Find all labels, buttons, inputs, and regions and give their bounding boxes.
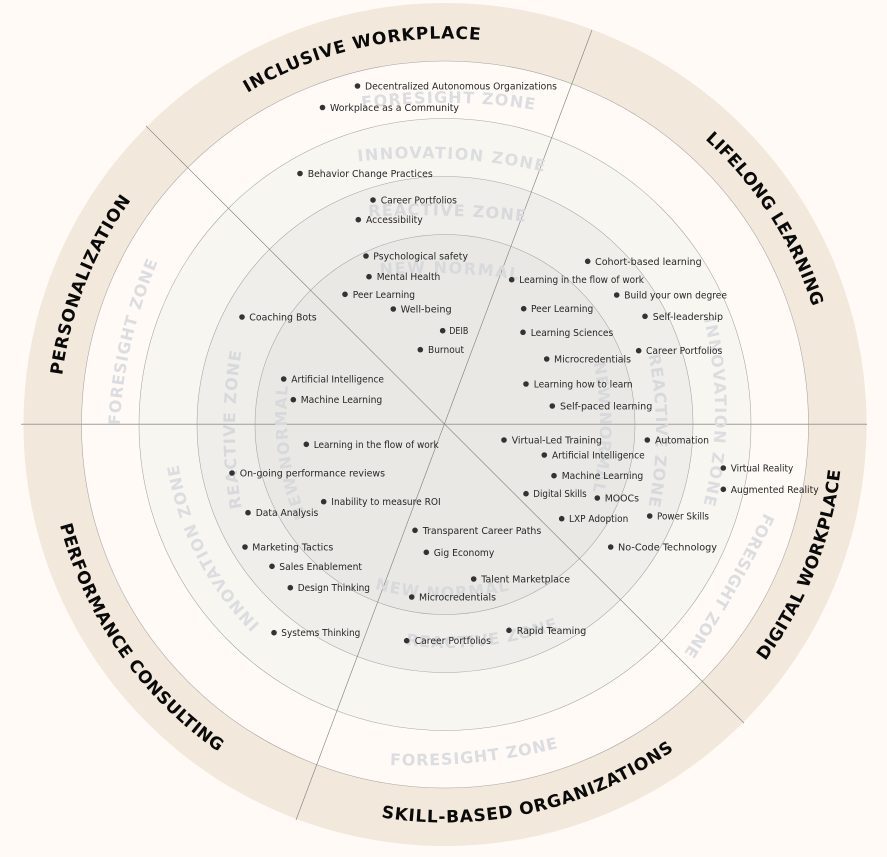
topic: Inability to measure ROI: Inability to measure ROI: [331, 497, 441, 508]
topic: No-Code Technology: No-Code Technology: [618, 542, 717, 554]
innovation zone ring: [139, 118, 751, 730]
topic: Machine Learning: Machine Learning: [301, 395, 382, 406]
zone labels: [108, 91, 774, 766]
topic: Automation: Automation: [655, 436, 709, 446]
topic: Microcredentials: Microcredentials: [419, 592, 496, 604]
title: performance consulting: PERFORMANCE CONSULTING: [60, 523, 224, 750]
topic: Learning in the flow of work: Learning in the flow of work: [314, 440, 439, 451]
title: digital workplace: DIGITAL WORKPLACE: [756, 470, 840, 660]
title: lifelong learning: LIFELONG LEARNING: [706, 131, 824, 306]
topic: LXP Adoption: LXP Adoption: [569, 514, 628, 525]
zone: new normal top: NEW NORMAL: [380, 261, 518, 280]
topic: Machine Learning: Machine Learning: [562, 471, 643, 482]
topic markers: inclusive workplace sector: [297, 82, 557, 356]
topic: Sales Enablement: Sales Enablement: [279, 562, 362, 573]
topic markers: personalization sector: [239, 312, 384, 406]
topic: Career Portfolios: Career Portfolios: [415, 636, 491, 647]
zone: foresight top: FORESIGHT ZONE: [362, 91, 535, 110]
title: skill-based organizations: SKILL-BASED ORGANIZATIONS: [382, 741, 672, 822]
topic: Well-being: Well-being: [401, 304, 452, 316]
topic: DEIB: [440, 326, 468, 337]
topic: On-going performance reviews: On-going performance reviews: [240, 468, 385, 480]
topic: Microcredentials: Microcredentials: [554, 354, 631, 366]
topic: Peer Learning: Peer Learning: [353, 290, 415, 301]
topic: Design Thinking: Design Thinking: [298, 583, 370, 594]
topic: Decentralized Autonomous Organizations: Decentralized Autonomous Organizations: [365, 82, 557, 92]
zone: innovation right: INNOVATION ZONE: [704, 317, 727, 506]
topic: Psychological safety: Psychological safety: [373, 252, 468, 262]
topic: Data Analysis: Data Analysis: [256, 508, 318, 519]
topic: Mental Health: Mental Health: [377, 272, 440, 283]
topic: Self-leadership: Self-leadership: [653, 312, 723, 323]
zone: innovation left: INNOVATION ZONE: [167, 466, 259, 632]
topic: Virtual Reality: Virtual Reality: [731, 464, 794, 474]
topic: Artificial Intelligence: Artificial Intelligence: [291, 374, 384, 386]
title: inclusive workplace: INCLUSIVE WORKPLACE: [242, 26, 480, 92]
zone: foresight lower right: FORESIGHT ZONE: [684, 514, 774, 658]
title: personalization: PERSONALIZATION: [50, 194, 130, 374]
topic markers: performance consulting sector: [229, 440, 441, 639]
topic: Artificial Intelligence: Artificial Intelligence: [552, 450, 645, 462]
zone: reactive bottom: REACTIVE ZONE: [407, 618, 557, 648]
topic: DEIB: DEIB: [449, 326, 468, 337]
new normal zone disc: [255, 234, 635, 614]
topic: Virtual-Led Training: Virtual-Led Training: [512, 436, 602, 446]
topic: Augmented Reality: Augmented Reality: [731, 485, 819, 496]
topic: Career Portfolios: Career Portfolios: [381, 196, 457, 206]
topic: Learning Sciences: Learning Sciences: [531, 328, 613, 339]
topic: Workplace as a Community: Workplace as a Community: [330, 103, 459, 114]
topic: Coaching Bots: Coaching Bots: [249, 312, 317, 324]
topic: Peer Learning: Peer Learning: [531, 304, 593, 315]
topic: Transparent Career Paths: Transparent Career Paths: [422, 526, 541, 537]
topic: Learning how to learn: Learning how to learn: [534, 380, 633, 390]
topic: Burnout: Burnout: [428, 345, 464, 356]
topic markers: lifelong learning sector: [509, 257, 727, 412]
topic: Talent Marketplace: Talent Marketplace: [480, 574, 570, 586]
zone: foresight bottom: FORESIGHT ZONE: [391, 737, 557, 766]
zone: reactive right: REACTIVE ZONE: [648, 354, 668, 507]
topic: Behavior Change Practices: Behavior Change Practices: [308, 169, 433, 180]
topic: Digital Skills: Digital Skills: [533, 489, 587, 500]
topic: Cohort-based learning: Cohort-based learning: [595, 257, 702, 268]
topic: Systems Thinking: Systems Thinking: [281, 628, 360, 639]
zone: reactive left: REACTIVE ZONE: [223, 351, 242, 508]
zone: new normal right: NEW NORMAL: [593, 362, 612, 492]
zone: innovation top: INNOVATION ZONE: [358, 146, 545, 172]
zone: new normal left: NEW NORMAL: [275, 386, 306, 520]
topic: Gig Economy: Gig Economy: [434, 548, 495, 559]
topic: Self-paced learning: Self-paced learning: [560, 402, 652, 412]
zone: new normal bottom: NEW NORMAL: [376, 578, 509, 598]
topic: Power Skills: Power Skills: [657, 512, 709, 522]
topic: Accessibility: Accessibility: [366, 215, 423, 226]
topic markers: skill-based organizations sector: [404, 526, 586, 647]
topic: Build your own degree: Build your own degree: [624, 290, 727, 302]
topic: Marketing Tactics: Marketing Tactics: [252, 542, 333, 554]
topic: Career Portfolios: Career Portfolios: [646, 346, 722, 357]
topic: MOOCs: MOOCs: [605, 494, 639, 504]
foresight zone ring: [82, 61, 808, 788]
topic markers: digital workplace sector: [501, 436, 819, 554]
zone: foresight left: FORESIGHT ZONE: [108, 258, 158, 424]
zone: reactive top: REACTIVE ZONE: [369, 204, 526, 222]
reactive zone ring: [197, 176, 693, 672]
topic: Rapid Teaming: Rapid Teaming: [517, 626, 586, 637]
topic: Learning in the flow of work: Learning in the flow of work: [519, 275, 644, 286]
